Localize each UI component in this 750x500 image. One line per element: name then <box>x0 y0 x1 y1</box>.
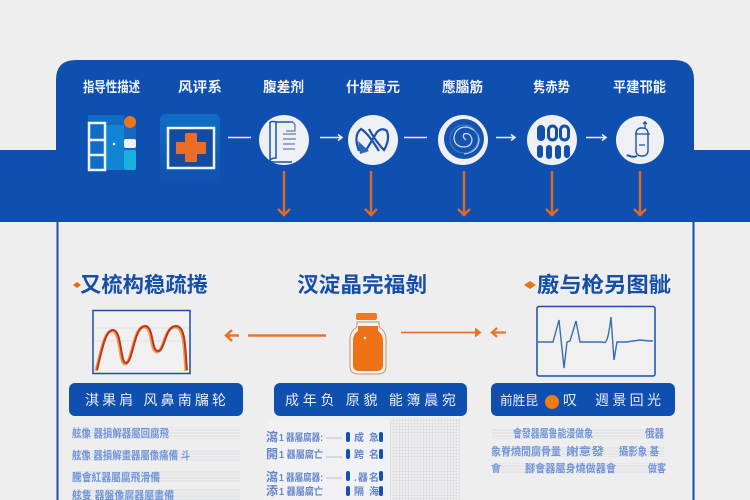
icon: iv bag circle <box>616 116 664 164</box>
panel: right banner: 週景回光 <box>595 392 661 408</box>
text block: right list: 腳會器屬身燒做器會 <box>525 461 616 475</box>
table: centre list: 1 器屬腐亡 <box>279 448 323 461</box>
arrow: bottle to ecg <box>401 328 506 337</box>
table: centre list: 1 器屬腐器: <box>279 471 323 484</box>
heading: centre: 汊淀晶完福剝 <box>297 273 427 297</box>
text block: right list: 會 <box>491 462 501 475</box>
panel: left banner <box>69 383 243 416</box>
text block: right list: 攝影象 基 <box>619 444 659 458</box>
table: centre list: 成急 <box>354 431 379 444</box>
icon: orange bottle <box>350 313 386 374</box>
panel: centre banner <box>274 383 467 416</box>
icon: document circle <box>259 115 309 165</box>
step labels: 指导性描述 <box>83 79 140 95</box>
frame lines <box>58 222 694 500</box>
panel: centre banner: 成年负 原貌 能簿晨宛 <box>285 392 456 408</box>
icon: pills circle <box>527 115 577 165</box>
table: centre list <box>266 418 460 500</box>
text block: right list: 會發器屬鲁能漫做象 <box>513 426 593 440</box>
table: centre list: 添 <box>266 483 278 498</box>
table: centre list: 開 <box>266 447 278 461</box>
step labels: 腹差剂 <box>263 79 304 95</box>
chart: orange and red curve <box>93 310 190 374</box>
chart: ecg waveform <box>537 306 655 376</box>
text block: left list: 舷像 器損解畫器屬像痛備 斗 <box>72 448 190 462</box>
table: centre list: 瀉 <box>266 469 278 484</box>
step labels: 风评系 <box>178 79 222 95</box>
connector lines between steps <box>228 134 606 140</box>
text block: left list: 騰會紅器屬腐飛滑備 <box>72 470 160 484</box>
text block: right list <box>491 426 666 475</box>
arrow: bottle to chart <box>226 330 326 341</box>
panel: right banner: 叹 <box>563 392 577 408</box>
text block: left list: 舷像 器損解器屬回腐飛 <box>72 426 169 440</box>
table: centre list: 隔海 <box>354 485 379 498</box>
panel: right banner: 前胜昆 <box>500 393 538 408</box>
step labels: 應腦筋 <box>442 79 483 95</box>
text block: left list <box>72 426 240 500</box>
text block: right list: 象脊燒閒腐骨量 <box>491 444 561 458</box>
table: centre list: 1 器屬腐亡 <box>279 485 323 498</box>
panel: right banner <box>491 383 675 416</box>
step labels: 平建邗能 <box>613 79 666 95</box>
table: centre list: 1 器屬腐器: <box>279 431 323 444</box>
table: centre list: 跨名 <box>354 448 379 461</box>
table: centre list: .器名 <box>354 471 379 484</box>
icon: spiral circle <box>438 115 488 165</box>
text block: right list: 做客 <box>648 461 666 475</box>
step labels: 什握量元 <box>346 79 400 95</box>
text block: right list: 俄器 <box>645 426 664 440</box>
step labels <box>83 79 666 95</box>
step labels: 隽赤势 <box>533 79 570 95</box>
heading: left: 又梳构稳疏捲 <box>80 273 208 297</box>
table: centre list: 瀉 <box>266 429 278 444</box>
icon: crossed ribbons circle <box>348 115 398 165</box>
orange down arrows <box>278 171 646 215</box>
panel: left banner: 淇果肩 风鼻南牖轮 <box>85 392 226 408</box>
icon: storage rack <box>88 115 136 170</box>
text block: right list: 謝意發 <box>566 444 604 458</box>
icon: medical cross screen <box>160 114 220 186</box>
heading: right: 廒与枪另图骴 <box>537 273 671 297</box>
